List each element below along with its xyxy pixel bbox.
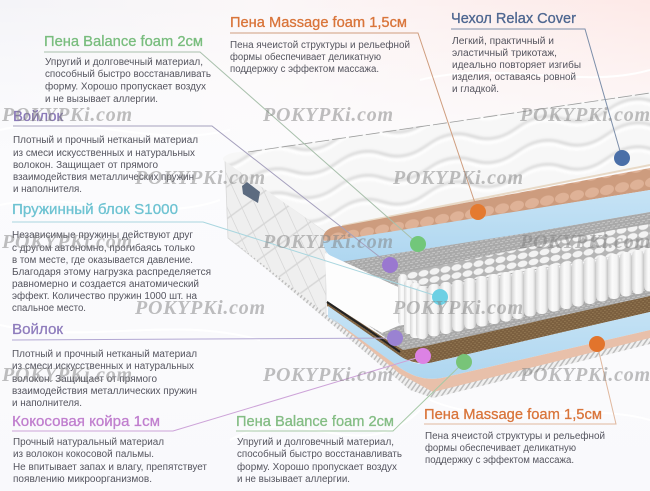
text: felt top: взаимодействия металлических пружин: [13, 172, 194, 183]
text: massage foam top: [230, 14, 410, 75]
text: coconut coir: Не впитывает запах и влагу, препятствует: [13, 462, 207, 473]
text: felt bottom: Плотный и прочный нетканый материал: [12, 349, 197, 360]
pocket springs: [398, 248, 650, 339]
text: cover: [451, 10, 581, 95]
text: felt top: Войлок: [13, 108, 63, 125]
text: spring block: Пружинный блок S1000: [12, 201, 178, 218]
watermarks: POKYPKi.com: [519, 104, 650, 126]
quilted top cover: [224, 92, 650, 232]
text: felt top: из смеси искусственных и натуральных: [13, 148, 195, 159]
text: felt bottom: из смеси искусственных и натуральных: [12, 361, 194, 372]
text: felt bottom: [12, 321, 197, 409]
text: balance foam bottom: форму. Хорошо пропускает воздух: [237, 461, 397, 473]
text: massage foam top: поддержку с эффектом массажа.: [230, 63, 379, 75]
brand label: [242, 182, 260, 203]
watermarks: [1, 104, 650, 386]
text: massage foam bottom: поддержку с эффектом массажа.: [425, 454, 574, 466]
layer marker dots: [382, 150, 630, 370]
mattress side quilted panel: [225, 160, 326, 316]
text: felt bottom: взаимодействия металлических пружин: [12, 386, 197, 397]
top balance foam layer: [323, 190, 650, 263]
text: cover: эластичный трикотаж,: [452, 48, 557, 59]
text: balance foam bottom: способный быстро восстанавливать: [237, 448, 402, 460]
text: balance foam top: форму. Хорошо пропускает воздух: [45, 80, 206, 92]
text: spring block: эффект. Количество пружин 1000 шт. на: [12, 290, 197, 302]
text: cover: Чехол Relax Cover: [451, 10, 576, 27]
dot: coconut: [415, 348, 431, 364]
watermarks: POKYPKi.com: [392, 297, 523, 319]
top massage foam layer: [323, 168, 650, 243]
text: massage foam bottom: Пена ячеистой структуры и рельефной: [425, 430, 605, 442]
text: massage foam top: формы обеспечивает деликатную: [230, 51, 381, 63]
dot: springs: [432, 289, 448, 305]
text: massage foam bottom: [424, 406, 605, 466]
text: spring block: [12, 201, 211, 314]
dot: massage foam top: [470, 204, 486, 220]
text: felt top: и наполнителя.: [13, 184, 82, 195]
text: massage foam bottom: формы обеспечивает деликатную: [425, 442, 576, 454]
text: balance foam top: [44, 33, 211, 105]
leader lines: [12, 29, 622, 431]
text: massage foam top: Пена ячеистой структуры и рельефной: [230, 39, 410, 51]
text: spring block: Независимые пружины действуют друг: [12, 230, 193, 241]
text: coconut coir: из волокон кокосовой пальмы.: [13, 449, 154, 460]
watermarks: POKYPKi.com: [519, 231, 650, 253]
text: spring block: спальное место.: [12, 303, 86, 314]
text: balance foam top: Пена Balance foam 2см: [44, 33, 203, 50]
text: cover: и гладкой.: [452, 84, 499, 95]
watermarks: POKYPKi.com: [262, 231, 393, 253]
dot: felt top: [382, 257, 398, 273]
upper felt layer: [340, 212, 650, 290]
text: spring block: с другом автономно, прогибаясь только: [12, 242, 195, 254]
dot: balance foam bottom: [456, 354, 472, 370]
bottom edge strip: [228, 237, 650, 398]
text: coconut coir: Кокосовая койра 1см: [12, 413, 160, 430]
text: massage foam bottom: Пена Massage foam 1,5см: [424, 406, 602, 423]
text: balance foam top: и не вызывает аллергии.: [45, 94, 158, 105]
watermarks: POKYPKi.com: [262, 104, 393, 126]
lower massage foam layer: [330, 317, 650, 392]
dot: balance foam top: [410, 236, 426, 252]
dot: cover: [614, 150, 630, 166]
watermarks: POKYPKi.com: [262, 364, 393, 386]
watermarks: POKYPKi.com: [392, 167, 523, 189]
mattress illustration: [215, 85, 650, 398]
watermarks: POKYPKi.com: [1, 104, 132, 126]
watermarks: POKYPKi.com: [1, 231, 132, 253]
text: balance foam bottom: Упругий и долговечный материал,: [237, 437, 394, 448]
pocket spring top rows: [398, 224, 650, 288]
text: cover: Легкий, практичный и: [452, 36, 554, 47]
text: coconut coir: [12, 413, 207, 485]
text: felt bottom: и наполнителя.: [12, 398, 82, 409]
text: cover: идеально повторяет изгибы: [452, 59, 581, 71]
watermarks: POKYPKi.com: [134, 297, 265, 319]
text: felt bottom: волокон. Защищает от прямого: [12, 374, 157, 385]
text: felt top: [13, 108, 198, 195]
text: balance foam top: Упругий и долговечный материал,: [45, 57, 203, 68]
white foam block: [325, 253, 398, 333]
coconut layer: [327, 296, 650, 363]
text: balance foam bottom: [236, 413, 402, 485]
watermarks: POKYPKi.com: [519, 364, 650, 386]
text: spring block: в том месте, где оказывается давление.: [12, 255, 193, 266]
dot: felt bottom: [387, 330, 403, 346]
text: spring block: равномерно и создается анатомический: [12, 279, 199, 290]
text: felt bottom: Войлок: [12, 321, 63, 338]
text: spring block: Благодаря этому нагрузка распределяется: [12, 267, 211, 278]
text: massage foam top: Пена Massage foam 1,5см: [230, 14, 407, 31]
lower balance foam layer: [328, 306, 650, 379]
watermarks: POKYPKi.com: [134, 167, 265, 189]
text: coconut coir: появлению микроорганизмов.: [13, 474, 152, 485]
watermarks: POKYPKi.com: [1, 364, 132, 386]
text: balance foam top: способный быстро восстанавливать: [45, 68, 211, 80]
lower felt layer: [368, 262, 650, 352]
text: cover: изделия, оставаясь ровной: [452, 72, 576, 83]
text: felt top: волокон. Защищает от прямого: [13, 160, 158, 171]
text: balance foam bottom: Пена Balance foam 2см: [236, 413, 394, 430]
text: felt top: Плотный и прочный нетканый материал: [13, 135, 198, 146]
dot: massage foam bottom: [589, 336, 605, 352]
text: balance foam bottom: и не вызывает аллергии.: [237, 474, 350, 485]
text: coconut coir: Прочный натуральный материал: [13, 437, 164, 448]
